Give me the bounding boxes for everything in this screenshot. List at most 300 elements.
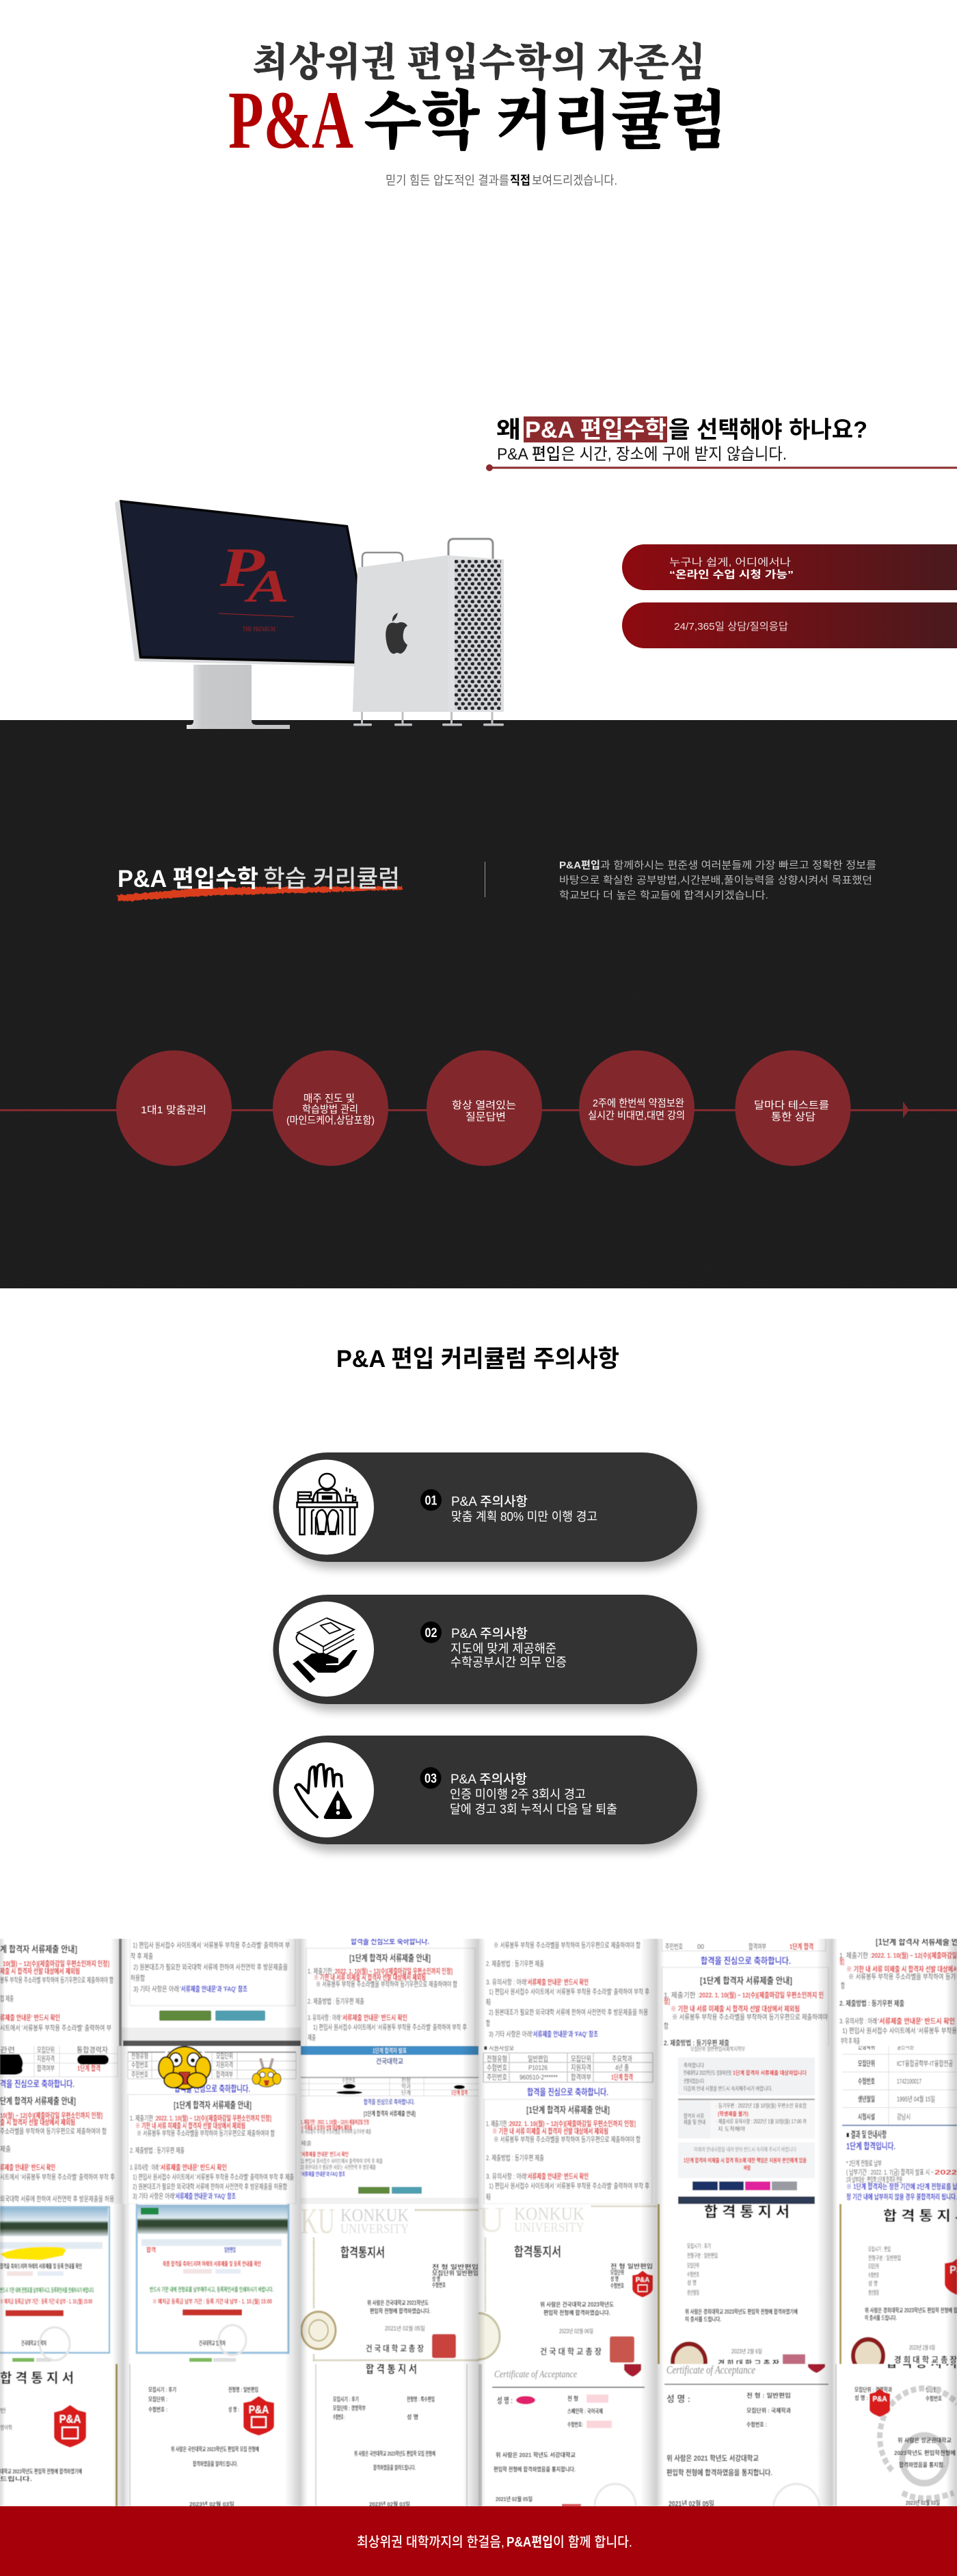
document tile r4c4 Sogang certificate: Certificate of Acceptance bbox=[494, 2369, 577, 2380]
lead sentence bbox=[386, 174, 617, 187]
document tile r1c6 bbox=[833, 1937, 957, 2046]
curriculum paragraph: 과 함께하시는 편준생 여러분들께 가장 빠르고 정확한 정보를 bbox=[600, 860, 876, 871]
document tile r3c5 Kyung Hee certificate: 전형구분 : 일반편입 bbox=[687, 2252, 718, 2259]
hero title block bbox=[228, 40, 727, 187]
document tile r2c3: 1) 편입사 원서접수 사이트에서 출력하여 부착 후 제출 bbox=[301, 2157, 383, 2164]
document tile r1c4: '서류제출 안내문'과 'FAQ' 참조 bbox=[532, 2030, 598, 2039]
document tile r4c6 SKKU certificate: 위 사람은 성균관대학교 bbox=[898, 2436, 952, 2443]
document tile r3c6 Kyung Hee certificate: 모집시기 : 편입 bbox=[868, 2246, 891, 2253]
document tile r4c1: 드립니다. bbox=[0, 2475, 32, 2482]
document tile r4c4 Sogang certificate: 스페인학 : 국어국제 bbox=[567, 2408, 603, 2415]
document tile r2c4: 2. 제출방법 : 등기우편 제출 bbox=[486, 2153, 544, 2162]
sub heading text: 은 시간, 장소에 구애 받지 않습니다. bbox=[561, 445, 787, 464]
document tile r1c5: 합격여부 bbox=[749, 1942, 766, 1951]
monitor bezel bbox=[120, 500, 374, 664]
document tile r4c2: 위 사람은 국민대학교 2023학년도 편입학 모집 전형에 bbox=[171, 2445, 259, 2452]
notice text: 달에 경고 3회 누적시 다음 달 퇴출 bbox=[450, 1803, 617, 1816]
document tile r2c6: 1단계 합격입니다. bbox=[846, 2141, 895, 2151]
document tile r1c2: '서류제출 안내문'과 'FAQ' 참조 bbox=[180, 1984, 247, 1993]
document tile r2c1: 모집단위 bbox=[37, 2045, 55, 2054]
document tile r2c5: 바람 bbox=[744, 2164, 751, 2171]
document tile r2c1: 류제출 안내문' 반드시 확인 bbox=[0, 2163, 55, 2172]
highlight box bbox=[524, 416, 667, 442]
document tile r3c5 Kyung Hee certificate: 위 사람은 경희대학교 2023학년도 편입학 전형에 합격하였기에 bbox=[685, 2308, 798, 2315]
circle: biweekly lecture: 2주에 한번씩 약점보완 bbox=[593, 1098, 684, 1109]
document tile r1c3: 3. 유의사항 : 아래 bbox=[308, 2014, 340, 2022]
document tile r2c4 bbox=[478, 2044, 658, 2205]
document tile r2c3: 제출 bbox=[301, 2140, 312, 2147]
screen logo: P bbox=[219, 536, 265, 598]
document tile r3c6 Kyung Hee certificate: 전형구분 : 일반편입 bbox=[868, 2255, 901, 2261]
document tile r3c3 Konkuk certificate bbox=[300, 2201, 479, 2365]
document tile r1c3: ※ 기한 내 서류 미제출 시 합격자 선발 대상에서 제외됨 bbox=[314, 1973, 426, 1982]
document tile r2c5: 지 도착해야 bbox=[718, 2125, 746, 2132]
document tile r1c6: 2. 제출방법 : 등기우편 제출 bbox=[839, 1999, 904, 2008]
document tile r3c5 Kyung Hee certificate: 합 격 통 지 서 bbox=[704, 2204, 790, 2220]
notice text: P&A 주의사항 bbox=[451, 1494, 528, 1509]
document tile r3c3 Konkuk certificate: 편입학 전형에 합격하였습니다. bbox=[370, 2307, 431, 2315]
document tile r4c5 Sogang certificate: 전 형 : 일반편입 bbox=[746, 2392, 791, 2399]
document tile r2c2 with emoji stickers: 2. 제출방법 : 등기우편 제출 bbox=[130, 2146, 185, 2155]
document tile r2c4: 1단계 합격 bbox=[611, 2073, 633, 2082]
document tile r2c3: 1단계 합격 bbox=[451, 2089, 468, 2096]
document tile r2c3: '서류제출 안내문'과 FAQ 참조 bbox=[301, 2170, 345, 2177]
document tile r3c4 Konkuk certificate: 합격통지서 bbox=[514, 2245, 561, 2259]
curriculum paragraph: P&A편입 bbox=[559, 860, 600, 871]
curriculum paragraph bbox=[559, 860, 876, 901]
document tile r3c5 Kyung Hee certificate: 이 증서를 드립니다. bbox=[685, 2315, 721, 2323]
document tile r1c3: 제출 bbox=[308, 2034, 316, 2042]
document tile r1c5: 합격을 진심으로 축하합니다. bbox=[701, 1956, 791, 1966]
document tile r2c4: 지원자격 bbox=[571, 2063, 591, 2072]
document tile r4c4 Sogang certificate: 성 명 : bbox=[497, 2396, 513, 2406]
document tile r2c4: P10126 bbox=[528, 2064, 548, 2072]
document tile r4c2: 전형명 : 일반편입 bbox=[228, 2386, 258, 2393]
document tile r3c3 Konkuk certificate: 수험번호 bbox=[432, 2281, 446, 2288]
number badge: 02 bbox=[425, 1626, 437, 1641]
document tile r1c1: 계 합격자 서류제출 안내] bbox=[0, 1944, 77, 1954]
document tile r4c6 SKKU certificate: 2023년 02월 03일 bbox=[906, 2499, 940, 2506]
document tile r4c6 SKKU certificate: 생년월일: bbox=[926, 2386, 942, 2393]
document tile r2c2 with emoji stickers: 합격여부 bbox=[216, 2070, 233, 2079]
document tile r2c1: 단계 합격자 서류제출 안내] bbox=[0, 2096, 76, 2106]
document tile r4c3: 합 격 통 지 서 bbox=[366, 2362, 417, 2376]
document tile r2c4: 주요학과 bbox=[612, 2055, 632, 2063]
document tile r2c4: ※ 기한 내 서류 미제출 시 합격자 선발 대상에서 제외됨 bbox=[492, 2127, 608, 2136]
pill text: 24/7,365일 상담/질의응답 bbox=[674, 621, 788, 633]
document tile r3c6 Kyung Hee certificate bbox=[833, 2203, 957, 2365]
document tile r3c2 bbox=[123, 2203, 301, 2365]
document tile r3c4 Konkuk certificate: 위 사람은 건국대학교 2023학년도 bbox=[540, 2300, 614, 2308]
document tile r4c5 Sogang certificate: 성 명 : bbox=[666, 2394, 690, 2404]
document tile r2c5: 아래의 안내사항을 내려 받아 반드시 숙지해 주시기 바랍니다 bbox=[694, 2146, 796, 2153]
document tile r2c3: 단계 bbox=[401, 2089, 411, 2096]
footer banner bbox=[0, 2506, 957, 2576]
document tile r1c3: [1단계 합격자 서류제출 안내] bbox=[349, 1953, 431, 1963]
document tile r2c2 with emoji stickers: '서류제출 안내문' 반드시 확인 bbox=[159, 2163, 227, 2172]
document tile r1c4: 3) 기타 사항은 아래 bbox=[489, 2030, 532, 2039]
document tile r4c3: 수험번호 : bbox=[333, 2413, 345, 2421]
document tile r3c1: 건국대학교 입학처 bbox=[21, 2339, 46, 2347]
document tile r4c4 Sogang certificate bbox=[478, 2363, 658, 2506]
document tile r2c6: * 2단계 전형료 납부 bbox=[846, 2160, 882, 2168]
document tile r3c5 Kyung Hee certificate: 수험번호 bbox=[687, 2271, 699, 2278]
illustration: monitor bbox=[115, 500, 374, 729]
document tile r3c2: 최종 합격을 축하드리며 아래의 서류제출 및 등록 안내를 확인 bbox=[163, 2260, 261, 2268]
document tile r4c5 Sogang certificate bbox=[656, 2363, 833, 2508]
document tile r2c6: ■ 결과 및 안내사항 bbox=[846, 2129, 887, 2140]
document tile r4c1: 영어학 bbox=[0, 2424, 12, 2431]
screen logo bbox=[219, 536, 294, 633]
document tile r3c3 Konkuk certificate: UNIVERSITY bbox=[340, 2222, 409, 2237]
document tile r4c6 SKKU certificate: 수험번호 bbox=[926, 2395, 942, 2402]
heading text: 을 선택해야 하나요? bbox=[669, 417, 867, 443]
document tile r2c1: 지원자격 bbox=[37, 2054, 55, 2063]
document tile r4c3 bbox=[301, 2362, 478, 2508]
document tile r4c2: 수험번호 : bbox=[148, 2406, 167, 2413]
circle: biweekly lecture: 실시간 비대면,대면 강의 bbox=[588, 1110, 685, 1121]
document tile r2c2 with emoji stickers: 전형유형 bbox=[131, 2052, 148, 2060]
document tile r2c3: 수험번호 bbox=[342, 2077, 355, 2084]
document tile r2c4: 일반편입 bbox=[528, 2054, 548, 2063]
document tile r2c2 with emoji stickers: '서류제출 안내문'과 'FAQ' 참조 bbox=[174, 2192, 236, 2201]
document tile r2c4: 주민번호 bbox=[487, 2073, 507, 2082]
document tile r1c3: '서류제출 안내문' 반드시 확인 bbox=[341, 2013, 407, 2022]
P&A shield stamp: P&A bbox=[872, 2395, 887, 2404]
document tile r2c2 with emoji stickers: 3. 유의사항 : 아래 bbox=[130, 2164, 159, 2172]
document tile r2c1: 통합경력자 bbox=[77, 2045, 108, 2054]
heading text: P&A 편입수학 bbox=[118, 866, 258, 892]
monitor screen bbox=[122, 503, 371, 661]
document tile r2c6: 2022 bbox=[934, 2168, 957, 2177]
footer text bbox=[357, 2534, 632, 2550]
document tile r4c3: 성 명 bbox=[407, 2413, 418, 2421]
P&A shield stamp bbox=[632, 2270, 653, 2298]
screen logo: THE PREMIUM bbox=[243, 626, 275, 633]
document tile r4c5 Sogang certificate: 2021년 02월 05일 bbox=[669, 2499, 714, 2508]
document tile r3c4 Konkuk certificate: 2023년 02월 06일 bbox=[559, 2328, 593, 2335]
timeline line with arrow bbox=[0, 1102, 957, 1118]
document tile r2c1: 관련 bbox=[0, 2046, 15, 2054]
document tile r1c4: 제출 bbox=[486, 1998, 491, 2006]
document tile r4c6 SKKU certificate: 2023학년도 편입학전형에 bbox=[894, 2449, 956, 2456]
front handle bbox=[448, 539, 493, 561]
document tile r3c2: ※ 예치금 등록금 납부 기간 : 등록 기간 내 납부 - 1. 10.(월) 15:00 bbox=[152, 2298, 272, 2305]
number badge: 01 bbox=[425, 1493, 437, 1509]
document tile r3c4 Konkuk certificate bbox=[478, 2199, 658, 2365]
back handle bbox=[362, 553, 403, 568]
document tile r3c6 Kyung Hee certificate: 합 격 통 지 서 bbox=[883, 2208, 957, 2223]
circle: weekly management: 매주 진도 및 bbox=[304, 1093, 355, 1104]
document tile r1c2 bbox=[122, 1939, 301, 2047]
illustration: Mac Pro tower bbox=[353, 539, 504, 726]
document tile r3c5 Kyung Hee certificate: 2023년 2월 6일 bbox=[731, 2348, 762, 2355]
document tile r4c2 bbox=[123, 2363, 301, 2508]
document tile r3c4 Konkuk certificate: 전 형 일반편입 bbox=[610, 2263, 653, 2270]
document tile r4c5 Sogang certificate: 모집단위 : 국제학과 bbox=[746, 2406, 791, 2414]
document tile r3c5 Kyung Hee certificate: 생년월일 bbox=[687, 2289, 699, 2296]
screen logo: A bbox=[244, 560, 289, 612]
document tile r2c6: 생년월일 bbox=[858, 2095, 875, 2103]
document tile r1c5: 1. 제출기한 : bbox=[664, 1991, 699, 2000]
title main: 수학 커리큘럼 bbox=[364, 86, 727, 157]
document tile r2c4: '서류제출 안내문' 반드시 확인 bbox=[526, 2172, 589, 2181]
heading text bbox=[496, 417, 867, 443]
emoji sticker large bbox=[159, 2043, 211, 2089]
document tile r2c3: 2) 원본대조가 필요한 서류는 사전연락 후 방문제출 bbox=[301, 2164, 376, 2170]
heading text: 학습 커리큘럼 bbox=[263, 866, 400, 892]
footer text: 이 함께 합니다. bbox=[553, 2534, 632, 2550]
heading text: 왜 bbox=[496, 417, 521, 443]
document tile r2c3 bbox=[300, 2045, 479, 2205]
document tile r1c2: 허용함 bbox=[131, 1974, 145, 1982]
document tile r1c5: 1단계 합격 bbox=[790, 1942, 813, 1951]
curriculum heading bbox=[118, 866, 403, 901]
document tile r2c4: 전형유형 bbox=[487, 2055, 507, 2063]
document tile r4c3: 합격하였음을 알려드립니다. bbox=[373, 2464, 416, 2471]
document tile r3c4 Konkuk certificate: 모집단위 bbox=[610, 2268, 624, 2276]
number badge bbox=[420, 1621, 442, 1643]
document tile r2c6: 1742100017 bbox=[897, 2077, 921, 2086]
lead sentence: 직접 bbox=[510, 174, 530, 187]
P&A shield stamp bbox=[243, 2396, 274, 2436]
P&A shield stamp: P&A bbox=[249, 2404, 269, 2416]
document tile r2c4: 3. 유의사항 : 아래 bbox=[486, 2173, 526, 2181]
document tile r4c1 bbox=[0, 2363, 124, 2506]
document tile r3c6 Kyung Hee certificate: 생년월일 bbox=[868, 2289, 879, 2296]
document tile r1c3: 2. 제출방법 : 등기우편 제출 bbox=[308, 1997, 364, 2006]
document tile r2c5: 모집단위 일반편입사회복지학부 bbox=[690, 2045, 745, 2052]
document tile r2c6: 일반지원 bbox=[897, 2042, 914, 2051]
document tile r2c1: 1단계 합격 bbox=[77, 2064, 100, 2073]
document tile r2c6: 시험시설 bbox=[858, 2112, 875, 2121]
document tile r4c1: 대학교 2023학년도 편입학 전형에 합격하였기에 bbox=[0, 2468, 82, 2475]
document tile r1c4: '서류제출 안내문' 반드시 확인 bbox=[526, 1978, 589, 1987]
document tile r4c3: 위 사람은 국민대학교 2023학년도 편입학 모집 전형에 bbox=[354, 2450, 435, 2457]
icon: book on hand bbox=[293, 1618, 358, 1683]
circle: weekly management: (마인드케어,상담포함) bbox=[286, 1115, 375, 1126]
document tile r1c5: ※ 기한 내 서류 미제출 시 합격자 선발 대상에서 제외됨 bbox=[671, 2004, 800, 2013]
document tile r2c6: 수험번호 bbox=[858, 2077, 875, 2086]
document tile r2c3: ※ 서류봉투 부착용 주소라벨을 부착하여 등기우편 제출 bbox=[301, 2128, 371, 2135]
document tile r4c3: 모집시기 : 후기 bbox=[333, 2395, 359, 2403]
document tile r3c5 Kyung Hee certificate bbox=[656, 2203, 833, 2368]
document tile r2c6: 모집단위 bbox=[858, 2059, 875, 2068]
document tile r1c5: 정] bbox=[664, 1997, 670, 2006]
document tile r3c6 Kyung Hee certificate: 모집단위 bbox=[868, 2263, 879, 2270]
document tile r3c5 Kyung Hee certificate: 모집시기 : 후기 bbox=[687, 2242, 711, 2250]
document tile r2c1: 출 시 합격자 선발 대상에서 제외됨 bbox=[0, 2118, 75, 2127]
document tile r3c1 bbox=[0, 2203, 124, 2365]
document tile r4c3: 2023년 02월 03일 bbox=[369, 2501, 410, 2508]
document tile r1c1: 류제출 안내문' 반드시 확인 bbox=[0, 2013, 60, 2022]
notice text: 수학공부시간 의무 인증 bbox=[450, 1656, 567, 1669]
document tile r1c6: 함 bbox=[841, 1982, 845, 1990]
document tile r3c3 Konkuk certificate: 위 사람은 건국대학교 2021학년도 bbox=[367, 2299, 429, 2307]
document tile r2c3: 1단계 합격자 발표 bbox=[373, 2047, 407, 2054]
number badge: 03 bbox=[424, 1772, 437, 1786]
document tile r1c3: 1. 제출기한 : bbox=[308, 1967, 335, 1976]
document tile r1c3: 합격을 진심으로 축하합니다. bbox=[351, 1936, 429, 1946]
document tile r2c4: 4년 졸 bbox=[615, 2064, 629, 2072]
document tile r2c2 with emoji stickers: [1단계 합격자 서류제출 안내] bbox=[174, 2100, 252, 2110]
document tile r3c4 Konkuk certificate: 편입학 전형에 합격하였습니다. bbox=[543, 2309, 610, 2316]
document tile r2c4: 합격여부 bbox=[571, 2073, 591, 2082]
document tile r1c5: 00 bbox=[697, 1943, 704, 1951]
document tile r2c3: '서류제출 안내문' 반드시 확인 bbox=[301, 2151, 349, 2157]
notice text: 맞춤 계획 80% 미만 이행 경고 bbox=[451, 1510, 597, 1524]
document tile r3c3 Konkuk certificate: 전 형 일반편입 bbox=[432, 2263, 478, 2270]
document tile r4c5 Sogang certificate: Certificate of Acceptance bbox=[666, 2365, 755, 2376]
lead sentence: 보여드리겠습니다. bbox=[532, 174, 617, 187]
footer text: P&A편입 bbox=[507, 2534, 553, 2550]
footer text: 최상위권 대학까지의 한걸음, bbox=[357, 2534, 504, 2550]
feature pill: 24/7 answers bbox=[622, 602, 957, 648]
document tile r4c5 Sogang certificate: 위 사람은 2021 학년도 서강대학교 bbox=[666, 2454, 759, 2463]
P&A shield stamp: P&A bbox=[59, 2413, 81, 2426]
document tile r2c1 bbox=[0, 2045, 122, 2205]
number badge bbox=[420, 1767, 442, 1789]
document tile r4c3: 전형명 : 특수편입 bbox=[407, 2395, 435, 2403]
document tile r2c2 with emoji stickers: 합격을 진심으로 축하합니다. bbox=[174, 2084, 250, 2094]
document tile r2c5: · 제출서류 유의사항 : 2022년 1월 10일(월) 17:00 까 bbox=[716, 2118, 807, 2125]
document tile r1c4 bbox=[478, 1939, 658, 2046]
notice text bbox=[450, 1772, 617, 1816]
feature pill: online viewing bbox=[622, 544, 957, 590]
document tile r2c2 with emoji stickers bbox=[122, 2045, 301, 2205]
document tile r3c1: 합격을 축하드리며 아래의 서류제출 및 등록 안내를 확인 bbox=[0, 2263, 82, 2270]
document tile r1c6: 정] bbox=[839, 1958, 844, 1966]
document tile r2c5: 제출 및 안내 bbox=[684, 2119, 705, 2125]
document tile r3c6 Kyung Hee certificate: 수험번호 bbox=[868, 2272, 879, 2279]
document tile r3c2: 일반편입 bbox=[224, 2246, 236, 2253]
document tile r3c6 Kyung Hee certificate: 2023년 2월 6일 bbox=[909, 2344, 935, 2351]
document tile r4c2: 합격하였음을 알려드립니다. bbox=[193, 2460, 238, 2467]
notice pill 3 bbox=[273, 1736, 701, 1852]
document tile r2c6: 강남시 bbox=[897, 2113, 911, 2121]
document tile r2c5: 축하합니다 bbox=[684, 2062, 705, 2069]
document tile r2c4: ■ 지원자정보 bbox=[484, 2044, 514, 2052]
document tile r3c5 Kyung Hee certificate: 경 희 대 학 교 총 장 bbox=[718, 2359, 779, 2368]
document tile r4c6 SKKU certificate: 합격하였음을 통지함. bbox=[899, 2461, 945, 2468]
document tile r2c4: [1단계 합격자 서류제출 안내] bbox=[526, 2105, 610, 2115]
document tile r2c2 with emoji stickers: ※ 기한 내 서류 미제출 시 합격자 선발 대상에서 제외됨 bbox=[135, 2121, 245, 2130]
document tile r2c2 with emoji stickers: 수험번호 bbox=[131, 2061, 148, 2069]
P&A shield stamp bbox=[54, 2405, 86, 2447]
document tile r3c6 Kyung Hee certificate: 성 명 bbox=[868, 2280, 878, 2287]
document tile r3c3 Konkuk certificate: 합격통지서 bbox=[340, 2246, 385, 2260]
monitor silver frame bbox=[115, 500, 374, 667]
tower legs bbox=[353, 712, 504, 726]
document tile r3c4 Konkuk certificate: KONKUK bbox=[514, 2205, 584, 2224]
document tile r2c5: (학생제출 불가) bbox=[718, 2110, 749, 2117]
circle: monthly test bbox=[736, 1050, 850, 1166]
document tile r4c6 SKKU certificate bbox=[833, 2356, 957, 2506]
notice text: P&A 주의사항 bbox=[451, 1626, 528, 1641]
document tile r4c4 Sogang certificate: 전 형 bbox=[567, 2395, 578, 2402]
document tile r2c2 with emoji stickers: 1. 제출기한 : bbox=[130, 2114, 156, 2123]
document tile r4c2: 모집시기 : 후기 bbox=[148, 2386, 176, 2393]
document tile r2c2 with emoji stickers: 지원자격 bbox=[216, 2060, 233, 2069]
document tile r4c3: 모집단위 : 경영학부 bbox=[333, 2404, 366, 2412]
document tile r3c2: 합격 bbox=[146, 2246, 156, 2253]
notice text bbox=[451, 1494, 597, 1524]
tower side panel bbox=[353, 555, 448, 712]
document tile r2c3: 1. 제출기한 : 2022. 1. 10(월) ~ 12(수) 제출마감일 인정 bbox=[301, 2119, 369, 2125]
document tile r2c6: 인정학위 bbox=[858, 2042, 875, 2051]
document tile r3c3 Konkuk certificate: 2021년 02월 05일 bbox=[385, 2324, 425, 2332]
notice text bbox=[450, 1626, 567, 1669]
circle: Q and A: 항상 열려있는 bbox=[452, 1100, 516, 1111]
document tile r2c5: 1단계 합격자 서류제출 대상자입니다 bbox=[733, 2069, 807, 2076]
document tile r4c4 Sogang certificate: 위 사람은 2021 학년도 서강대학교 bbox=[496, 2452, 576, 2458]
dark curriculum section background bbox=[0, 720, 957, 1288]
P&A shield stamp bbox=[870, 2389, 890, 2417]
notice text: P&A 주의사항 bbox=[450, 1772, 527, 1787]
emoji sticker small bbox=[252, 2058, 281, 2087]
document tile r1c2: 착 후 제출 bbox=[131, 1952, 153, 1961]
document tile r4c6 SKKU certificate: 성 명 : bbox=[854, 2394, 868, 2401]
document tile r1c6: 1. 제출기한 : bbox=[839, 1952, 872, 1960]
circle: Q and A bbox=[427, 1050, 542, 1166]
monitor stand bbox=[187, 665, 290, 729]
document tile r1c3 bbox=[300, 1936, 478, 2047]
document tile r4c6 SKKU certificate: 합 격 통 지 서 bbox=[886, 2356, 957, 2370]
document tile r2c6 bbox=[833, 2042, 957, 2205]
document tile r2c3: 건국대학교 bbox=[376, 2057, 403, 2066]
document tile r1c4: 함 bbox=[486, 2019, 490, 2028]
red brush stroke bbox=[118, 886, 403, 901]
document tile r2c5: · 등기우편 : 2022년 1월 10일(월) 우편소인 유효함 bbox=[716, 2102, 807, 2109]
document tile r2c1: 격을 진심으로 축하합니다. bbox=[0, 2079, 75, 2089]
heading text: P&A 편입수학 bbox=[525, 417, 666, 443]
tower grille bbox=[455, 559, 501, 710]
document tile r4c2: 성 명 : bbox=[228, 2406, 239, 2413]
document tile r3c4 Konkuk certificate: U bbox=[478, 2199, 504, 2240]
title P&A red: P&A bbox=[228, 75, 353, 166]
document tile r2c1: 제출 bbox=[0, 2145, 11, 2153]
document tile r2c4: 1. 제출기한 : bbox=[486, 2120, 509, 2128]
P&A shield stamp: P&A bbox=[636, 2276, 649, 2284]
document tile r2c4: 수험번호 bbox=[487, 2064, 507, 2072]
document tile r4c4 Sogang certificate: 편입학 전형에 합격하였음을 통지합니다. bbox=[494, 2465, 576, 2473]
document tile r2c3: 전형 bbox=[401, 2077, 411, 2084]
document tile r2c3: [1단계 합격자 서류제출 안내] bbox=[364, 2110, 416, 2117]
document tile r4c2: 모집단위 : bbox=[148, 2395, 167, 2403]
tower front panel bbox=[448, 555, 504, 712]
circle: 1on1: 1대1 맞춤관리 bbox=[141, 1104, 206, 1116]
document tile r4c4 Sogang certificate: 2021년 02월 05일 bbox=[496, 2495, 533, 2502]
P&A shield stamp bbox=[945, 2257, 957, 2296]
document tile r3c4 Konkuk certificate: UNIVERSITY bbox=[514, 2220, 584, 2235]
curriculum paragraph: 바탕으로 확실한 공부방법,시간분배,풀이능력을 상향시켜서 목표했던 bbox=[559, 875, 872, 886]
notice pill 2 bbox=[273, 1595, 701, 1711]
circle: 1on1 bbox=[116, 1050, 232, 1166]
circle: biweekly lecture bbox=[579, 1050, 695, 1166]
notice pill 1 bbox=[273, 1452, 701, 1569]
heading underline with dot bbox=[486, 464, 957, 471]
circle: weekly management: 학습방법 관리 bbox=[302, 1104, 358, 1115]
icon: person studying at desk bbox=[297, 1474, 357, 1535]
document tile r3c3 Konkuk certificate: 모집단위 일반편입 bbox=[432, 2270, 478, 2276]
document tile r2c3: 학과 bbox=[401, 2083, 412, 2090]
icon: stop hand with warning bbox=[295, 1764, 352, 1819]
notice text: 인증 미이행 2주 3회시 경고 bbox=[450, 1788, 586, 1801]
document tile r3c3 Konkuk certificate: KONKUK bbox=[340, 2206, 409, 2225]
sub heading text: P&A 편입 bbox=[497, 445, 561, 464]
document tile r4c2: 2023년 02월 03일 bbox=[189, 2501, 234, 2508]
document tile r1c6: 3. 유의사항 : 아래 bbox=[839, 2017, 877, 2026]
